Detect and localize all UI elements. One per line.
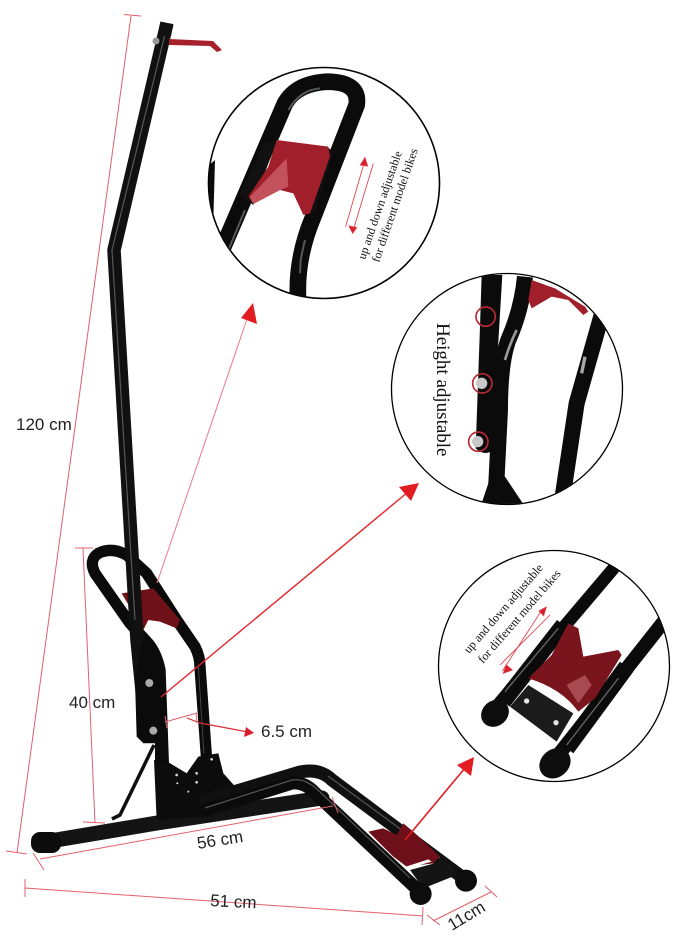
front plate, red pad and feet (368, 823, 477, 905)
caption: for different model bikes: for different model bikes (369, 146, 421, 264)
tubes and plate (469, 275, 605, 510)
label: 120 cm: 120 cm (16, 415, 72, 434)
label: 6.5 cm: 6.5 cm (261, 722, 312, 741)
arrow: to middle detail (161, 483, 419, 697)
label: 51 cm: 51 cm (210, 891, 257, 912)
arrow: to top detail (157, 303, 257, 583)
height bracket and bolts (135, 638, 167, 763)
top red hook (169, 39, 222, 52)
detail circle: height adjustment (392, 274, 622, 510)
double arrow: bottom detail (500, 607, 550, 673)
caption: up and down adjustable: up and down adjustable (461, 561, 546, 656)
main upright pole (112, 22, 173, 700)
arrow: to bottom detail (405, 757, 474, 840)
base gusset with holes (154, 753, 253, 820)
arrow: 6.5 cm pointer (187, 718, 254, 737)
dimension lines (6, 14, 497, 925)
rear loop of wheel holder (92, 550, 207, 763)
base foot bar (31, 798, 322, 853)
label: 56 cm: 56 cm (196, 827, 244, 853)
kickstand (112, 745, 154, 819)
caption: for different model bikes: for different model bikes (475, 566, 564, 666)
U tube (207, 82, 357, 303)
bike stand product (31, 22, 477, 905)
caption: up and down adjustable: up and down adjustable (355, 149, 405, 261)
double arrow: top detail (346, 158, 373, 233)
caption: height adjustable: Height adjustable (432, 323, 453, 456)
tubes, pad, plate, feet (476, 567, 665, 785)
front arm tubes (200, 771, 466, 892)
label: 11cm: 11cm (444, 897, 489, 934)
detail circle: wheel holder top (207, 68, 440, 303)
detail circle: front wheel holder (438, 550, 670, 785)
label: 40 cm: 40 cm (69, 693, 115, 712)
